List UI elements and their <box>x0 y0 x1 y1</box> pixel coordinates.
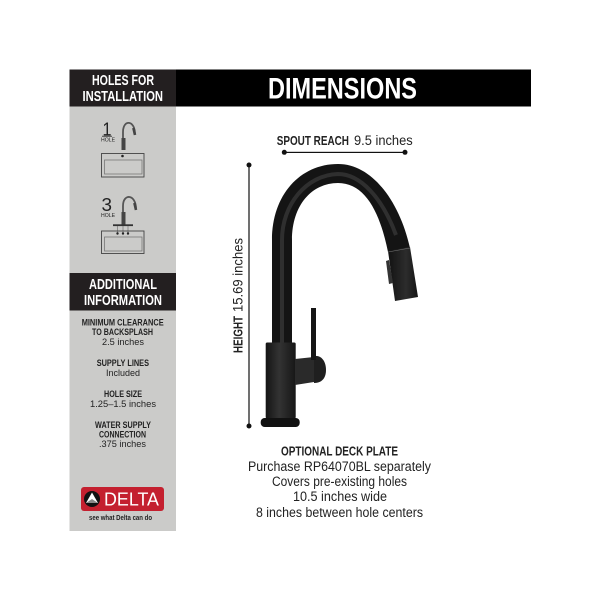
heading: additional information: ADDITIONAL <box>89 277 157 293</box>
heading: dimensions <box>176 70 531 106</box>
heading: holes for installation <box>70 70 176 106</box>
heading: holes for installation: HOLES FOR <box>92 73 154 89</box>
faucet spray button <box>386 260 393 284</box>
text: water supply connection <box>95 420 152 450</box>
faucet spray head <box>388 247 418 301</box>
icon: three hole installation <box>101 195 144 254</box>
text: optional deck plate: Covers pre-existing holes <box>272 474 407 489</box>
label: spout reach <box>277 133 413 148</box>
icon: three hole installation: HOLE <box>101 213 116 219</box>
text: water supply connection: WATER SUPPLY <box>95 420 152 431</box>
text: supply lines: Included <box>106 368 140 379</box>
text: water supply connection: CONNECTION <box>99 430 146 440</box>
icon: one hole installation: 1 <box>102 120 112 140</box>
text: hole size: HOLE SIZE <box>104 389 142 400</box>
text: minimum clearance: MINIMUM CLEARANCE <box>82 318 164 329</box>
faucet head seam <box>388 248 410 252</box>
text: minimum clearance <box>82 318 164 348</box>
faucet handle cap <box>314 356 326 383</box>
logo: delta <box>81 487 164 522</box>
text: minimum clearance: TO BACKSPLASH <box>92 327 153 338</box>
heading: dimensions: DIMENSIONS <box>268 72 417 106</box>
label: height: HEIGHT <box>230 316 246 353</box>
text: water supply connection: .375 inches <box>99 439 146 450</box>
illustration: black faucet <box>261 164 418 427</box>
text: optional deck plate: 8 inches between hole centers <box>256 505 423 520</box>
faucet body <box>266 342 296 418</box>
label: spout reach: 9.5 inches <box>354 133 413 148</box>
text: supply lines <box>97 358 149 379</box>
icon: one hole installation: HOLE <box>101 138 116 144</box>
label: spout reach: SPOUT REACH <box>277 133 349 148</box>
text: optional deck plate: Purchase RP64070BL separately <box>248 459 431 474</box>
text: optional deck plate: 10.5 inches wide <box>293 489 387 504</box>
text: hole size: 1.25–1.5 inches <box>90 399 156 410</box>
label: height <box>230 238 246 353</box>
icon: three hole installation: 3 <box>102 195 112 215</box>
faucet base flange <box>261 418 300 427</box>
arrow: height dimension line <box>246 162 252 428</box>
icon: one hole installation <box>101 120 144 177</box>
faucet spout <box>272 164 410 345</box>
text: supply lines: SUPPLY LINES <box>97 358 149 369</box>
arrow: spout reach dimension line <box>282 150 408 155</box>
logo: delta: DELTA <box>104 488 160 510</box>
label: height: 15.69 inches <box>230 238 246 312</box>
faucet lever <box>311 308 316 360</box>
heading: additional information <box>70 273 176 310</box>
panel: left sidebar <box>70 70 176 531</box>
heading: additional information: INFORMATION <box>84 293 162 309</box>
text: optional deck plate: OPTIONAL DECK PLATE <box>281 444 398 459</box>
faucet handle stem <box>295 357 314 385</box>
text: minimum clearance: 2.5 inches <box>102 337 144 348</box>
heading: holes for installation: INSTALLATION <box>82 89 163 105</box>
logo: delta: see what Delta can do <box>89 513 152 522</box>
text: hole size <box>90 389 156 410</box>
text: optional deck plate <box>248 444 431 520</box>
faucet spout highlight <box>282 174 396 343</box>
